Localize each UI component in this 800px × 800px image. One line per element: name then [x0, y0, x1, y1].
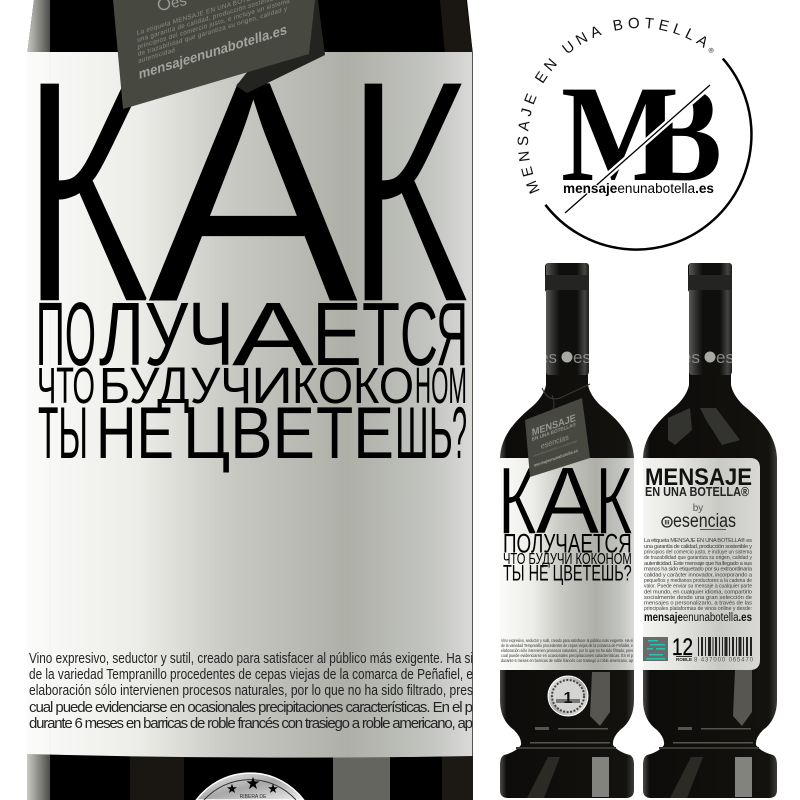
body grey highlight [733, 670, 752, 726]
large bottle: ? [452, 393, 467, 474]
small label headline: ТЫ НЕ ЦВЕТЕШЬ? [503, 560, 632, 585]
large headline text: ЦВЕ [183, 393, 315, 474]
large headline text [38, 80, 466, 472]
right sheen top [440, 0, 473, 55]
base diagonal sheen [670, 757, 703, 798]
base diagonal sheen [527, 757, 560, 798]
bottom left highlight [27, 750, 50, 800]
by: by [693, 503, 703, 514]
logo url: mensajeenunabotella.es [563, 180, 714, 196]
logo ring arc [545, 59, 751, 250]
label inner fold line [50, 52, 51, 754]
barcode: 8 437000 065470 [694, 658, 754, 664]
tag logo [158, 0, 170, 10]
wine description paragraph: elaboración sólo intervienen procesos naturales, por lo que no ha sido filtrado, pres [29, 682, 473, 699]
large headline text: ШЬ [395, 393, 453, 474]
tag subtitle: EN UNA BOTELLA® [532, 421, 576, 443]
bottom right band [442, 756, 473, 800]
back label [643, 458, 760, 670]
back label paragraph [644, 537, 753, 612]
back label paragraph: socialmente desde una gran selección de [644, 595, 752, 601]
bottle silhouette [643, 263, 777, 798]
tag string [542, 384, 590, 412]
small label paragraph: durante 6 meses en barricas de roble francés con trasiego a roble americano, ap [501, 658, 633, 663]
round logo [518, 18, 753, 251]
base ridge [659, 747, 759, 749]
small label headline: К [498, 448, 537, 555]
MB monogram [563, 84, 719, 214]
wine description paragraph: de la variedad Tempranillo procedentes de cepas viejas de la comarca de Peñafiel, e [29, 666, 473, 683]
small label paragraph [501, 638, 634, 663]
esencias logo: esencias [673, 511, 736, 532]
large headline text: ТЫ [38, 393, 88, 474]
wine description paragraph: cual puede evidenciarse en ocasionales precipitaciones características. En el p [29, 699, 473, 716]
tag text: de trazabilidad que garantiza su origen, calidad y [138, 5, 288, 58]
large headline text: Т [362, 285, 400, 385]
small label paragraph: de la variedad Tempranillo procedentes de cepas viejas de la comarca de Peñafiel, e [501, 643, 633, 648]
large medal: ★ [226, 781, 238, 796]
back label paragraph: pequeños y medianos productores a la cadena de [644, 578, 752, 584]
large headline text: ПО [36, 285, 96, 385]
body grey highlight [590, 672, 610, 726]
large headline text: КОКО [292, 357, 414, 414]
12 months: 12 [672, 634, 693, 661]
right dark edge [472, 52, 473, 756]
hanging tag on large bottle [113, 0, 325, 109]
large label background [27, 52, 473, 758]
tag text: mensajeenunabotella.es [138, 21, 287, 82]
large headline text: К [346, 12, 470, 370]
large headline text: Я [436, 285, 468, 385]
small back bottle [643, 263, 777, 798]
12 months: ROBLE [676, 657, 692, 662]
small label [500, 458, 634, 670]
tag fold shadow [236, 0, 325, 93]
tag wordmark: MENSAJE [532, 413, 576, 439]
MB monogram: B [642, 57, 722, 210]
back label paragraph: de trazabilidad que garantiza su origen, calidad y [644, 555, 752, 561]
back label paragraph: del mundo, en cualquier idioma, compartirlo [644, 590, 752, 596]
back label paragraph: autenticidad. Este mensaje que ha llegado a sus [644, 561, 752, 567]
tag body [525, 398, 590, 477]
large headline text: К [21, 12, 151, 370]
bottle glass bottom [50, 754, 442, 800]
large headline text: А [146, 12, 362, 370]
bottom brown band [130, 756, 184, 800]
cap ring [688, 275, 732, 290]
neck shine [546, 263, 589, 375]
wine description paragraph: durante 6 meses en barricas de roble francés con trasiego a roble americano, ap [29, 715, 473, 732]
small label headline: К [595, 448, 633, 555]
tag copy: La etiqueta MENSAJE EN UNA BOTELLA es una garantía de calidad [533, 440, 577, 458]
curved brand text: MENSAJE EN UNA BOTELLA® [518, 18, 714, 194]
text: НОМ [415, 357, 467, 414]
small label headline: А [535, 448, 600, 555]
small label paragraph: cual puede evidenciarse en ocasionales precipitaciones características. En el p [501, 653, 633, 658]
base grey highlight [735, 757, 752, 797]
back label paragraph: calidad y carácter innovador, incorporando a [644, 572, 753, 578]
back label title: MENSAJE [645, 464, 752, 491]
shoulder highlights [668, 408, 740, 445]
left highlight top [27, 0, 50, 55]
back label paragraph: principios del comercio justo, e incluye un sistema [644, 550, 753, 556]
base ridge [516, 747, 616, 749]
bottle glass top [27, 0, 473, 55]
small medal [548, 676, 588, 716]
neck logo: es [539, 348, 557, 367]
back label paragraph: valor. Puede enviar su mensaje a cualquier parte [644, 584, 752, 590]
large medal: RIBERA DE [240, 794, 267, 800]
bottom grey band [333, 757, 390, 800]
cap ring [545, 275, 589, 290]
large headline text: ЛУЧ [99, 285, 234, 385]
large headline text: И [251, 357, 293, 414]
back label paragraph: La etiqueta MENSAJE EN UNA BOTELLA® es [644, 537, 752, 544]
tag text: autenticidad [138, 47, 175, 65]
large medal: ★ [267, 781, 279, 796]
neck shine [689, 263, 732, 375]
small label headline: ПОЛУЧАЕТСЯ [503, 529, 632, 559]
hologram seal [643, 637, 668, 661]
neck logo [546, 352, 589, 363]
body glints [530, 727, 610, 744]
wine description paragraph [29, 650, 473, 732]
large bottle [21, 0, 474, 800]
back label paragraph: manos ha sido etiquetado por su extraordinaria [644, 566, 753, 572]
wine description paragraph: Vino expresivo, seductor y sutil, creado para satisfacer al público más exigente. Ha si [29, 650, 473, 667]
small label paragraph: Vino expresivo, seductor y sutil, creado para satisfacer al público más exigente. Ha si [501, 638, 633, 643]
tag brand: esencias [541, 432, 569, 451]
MB monogram: M [561, 57, 679, 210]
back label paragraph: una garantía de calidad, producción sostenible y [644, 544, 752, 550]
back label paragraph: principales plataformas de vinos online y desde: [644, 606, 752, 612]
neck logo: es [716, 348, 734, 367]
tag body [113, 0, 315, 109]
neck logo: es [573, 348, 591, 367]
small medal: 1 [564, 690, 573, 707]
large headline text: НЕ [96, 393, 174, 474]
small label headline: ЧТО БУДУЧИ КОКОНОМ [503, 551, 632, 568]
large headline text: ТЕ [316, 393, 394, 474]
small label headline [498, 448, 633, 585]
back label paragraph: mensajes o personalizarlo, a través de las [644, 600, 752, 606]
small hanging tag [525, 384, 590, 477]
large medal [196, 773, 304, 800]
large headline text: ЧТО [37, 357, 95, 414]
small label paragraph: elaboración sólo intervienen procesos naturales, por lo que no ha sido filtrado, pres [501, 648, 634, 653]
body glints [673, 727, 753, 744]
back label url: mensajeenunabotella.es [644, 612, 752, 624]
small front bottle [498, 263, 634, 798]
large headline text: БУДУЧ [99, 357, 252, 414]
bottle silhouette [500, 263, 634, 798]
esencias logo: III [664, 520, 670, 526]
neck logo [689, 352, 732, 363]
large headline text: Е [312, 285, 362, 385]
back label subtitle: EN UNA BOTELLA® [645, 485, 750, 499]
large headline text: А [232, 285, 314, 385]
tag url: mensajeenunabotella.es [534, 448, 578, 468]
large headline text: С [400, 285, 438, 385]
neck logo: es [682, 348, 700, 367]
barcode [694, 637, 754, 664]
base grey highlight [592, 757, 609, 797]
large medal: ★ [245, 774, 261, 793]
